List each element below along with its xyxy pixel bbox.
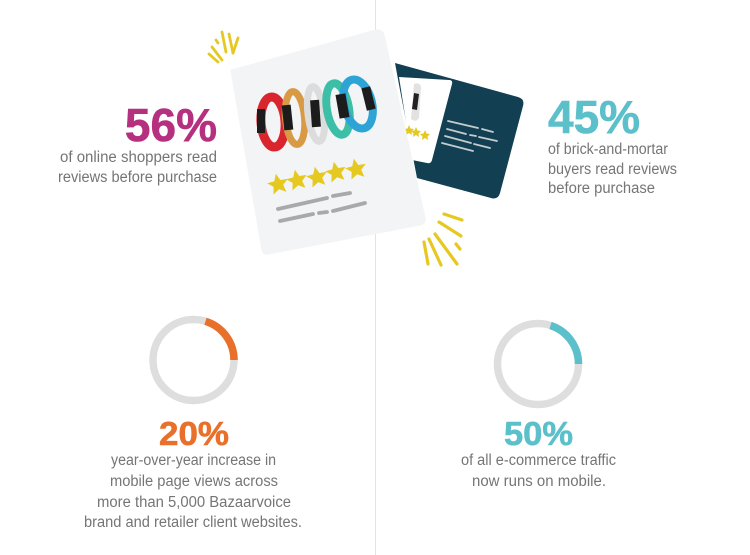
stat: 45% brick-and-mortar buyers [548, 91, 677, 197]
stat: 20% mobile page views: more than 5,000 Bazaarvoice [97, 494, 291, 511]
stat: 45% brick-and-mortar buyers: before purchase [548, 180, 655, 197]
icon: dark review card [395, 63, 523, 198]
stat: 50% mobile traffic: 50% [504, 415, 573, 452]
stat: 20% mobile page views: year-over-year increase in [111, 452, 276, 469]
stat: 50% mobile traffic: of all e-commerce traffic [461, 452, 616, 469]
icon: five stars [266, 157, 368, 195]
stat: 45% brick-and-mortar buyers: buyers read reviews [548, 161, 677, 178]
chart: 20% donut [153, 320, 234, 400]
stat: 20% mobile page views: mobile page views across [110, 473, 278, 490]
stat: 45% brick-and-mortar buyers: 45% [548, 91, 640, 143]
icon: yellow burst bottom [424, 214, 462, 265]
stat: 56% online shoppers: 56% [125, 99, 217, 151]
stat: 50% mobile traffic [461, 415, 616, 490]
stat: 56% online shoppers [58, 99, 217, 186]
stat: 20% mobile page views: 20% [159, 415, 229, 452]
stat: 20% mobile page views: brand and retailer client websites. [84, 514, 302, 531]
icon: front review card [232, 31, 424, 253]
icon: fitness bands [257, 76, 378, 148]
stat: 45% brick-and-mortar buyers: of brick-and-mortar [548, 141, 668, 158]
stat: 56% online shoppers: of online shoppers read [60, 149, 217, 166]
icon: yellow burst top [209, 32, 238, 62]
stat: 50% mobile traffic: now runs on mobile. [472, 473, 606, 490]
stat: 20% mobile page views [84, 415, 302, 531]
stat: 56% online shoppers: reviews before purchase [58, 169, 217, 186]
chart: 50% donut [498, 324, 578, 404]
